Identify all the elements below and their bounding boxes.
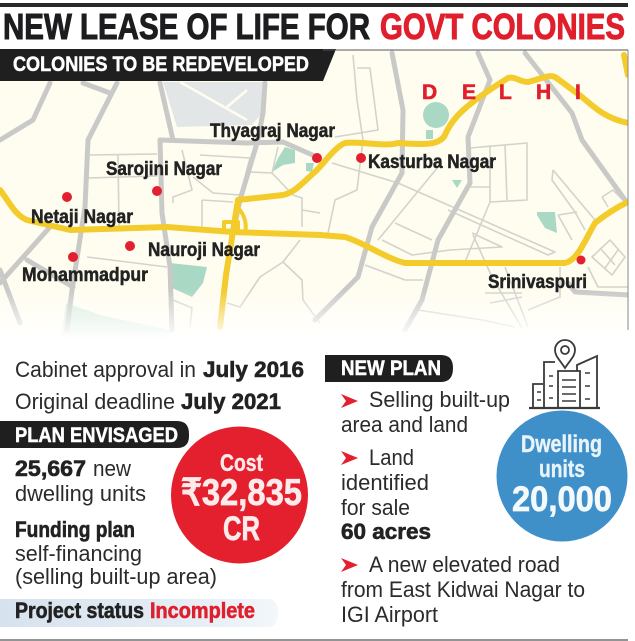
text: plan details: dwelling units [15, 481, 146, 506]
label: DELHI: I [575, 81, 581, 104]
map border [627, 50, 629, 330]
icon: city buildings with location pin [529, 340, 600, 408]
label: DELHI [422, 81, 581, 104]
colony labels [22, 121, 587, 293]
fade [0, 290, 629, 340]
arrow: bullet 2 [341, 451, 358, 465]
text: plan details: self-financing [15, 541, 142, 566]
list: new plan points: area and land [341, 412, 468, 437]
text: approval dates: Cabinet approval in [15, 357, 196, 382]
colony markers [62, 153, 586, 264]
label: DELHI: H [536, 81, 551, 104]
text: plan details: Funding plan [15, 517, 135, 542]
heading: plan envisaged: PLAN ENVISAGED [15, 424, 178, 447]
callout: cost circle: Cost [220, 450, 263, 477]
arrow: bullet 1 [341, 394, 358, 408]
list: new plan points: for sale [341, 495, 410, 520]
colony labels: Nauroji Nagar [148, 240, 261, 261]
colony labels: Netaji Nagar [31, 207, 134, 228]
colony labels: Srinivaspuri [488, 272, 587, 293]
text: plan details [15, 456, 217, 589]
project status [0, 598, 278, 627]
top rule [0, 3, 628, 7]
text: approval dates: Original deadline [15, 389, 175, 414]
list: new plan points: A new elevated road [369, 552, 560, 577]
text: approval dates [15, 357, 304, 414]
map heading band [0, 49, 336, 81]
title: NEW LEASE OF LIFE FOR [3, 6, 370, 47]
callout: cost circle [171, 426, 308, 564]
yellow roads [0, 55, 628, 327]
label: DELHI: D [422, 81, 437, 104]
lake [163, 82, 264, 127]
project status: Project status [15, 598, 144, 623]
thin roads [87, 55, 628, 328]
parks [60, 102, 557, 345]
text: approval dates: July 2021 [181, 389, 281, 414]
colony labels: Thyagraj Nagar [210, 121, 336, 142]
project status: Incomplete [150, 598, 255, 623]
thick gray roads [0, 53, 628, 330]
colony labels: Mohammadpur [22, 265, 149, 286]
map heading band: COLONIES TO BE REDEVELOPED [13, 53, 309, 76]
label: DELHI: L [499, 81, 512, 104]
callout: cost circle: ₹32,835 [181, 472, 302, 513]
colony labels: Kasturba Nagar [368, 152, 497, 173]
colony labels: Sarojini Nagar [106, 159, 223, 180]
list: new plan points: identified [341, 470, 429, 495]
panel: map of Delhi [0, 50, 629, 346]
heading: new plan: NEW PLAN [341, 357, 441, 380]
list: new plan points: IGI Airport [341, 602, 438, 627]
callout: dwelling units circle: Dwelling [521, 431, 602, 458]
arrow: bullet 3 [341, 558, 358, 572]
text: plan details: new [93, 456, 131, 481]
callout: dwelling units circle: units [539, 456, 585, 483]
list: new plan points: Selling built-up [369, 387, 510, 412]
list: new plan points: from East Kidwai Nagar to [341, 577, 585, 602]
label: DELHI: E [462, 81, 476, 104]
callout: dwelling units circle [496, 410, 628, 542]
list: new plan points: Land [369, 445, 414, 470]
text: approval dates: July 2016 [203, 357, 304, 382]
callout: dwelling units circle: 20,000 [512, 480, 612, 519]
callout: cost circle: CR [223, 510, 260, 548]
list: new plan points [341, 387, 585, 627]
list: new plan points: 60 acres [341, 519, 431, 544]
text: plan details: (selling built-up area) [15, 564, 217, 589]
text: plan details: 25,667 [15, 456, 86, 481]
